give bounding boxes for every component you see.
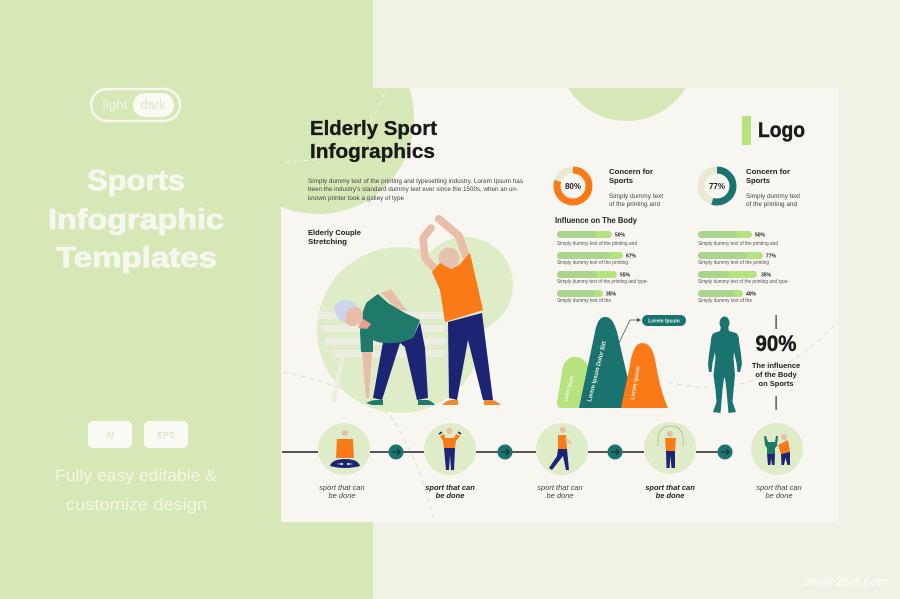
donut chart: 80% bbox=[557, 170, 589, 202]
caption 1 bbox=[319, 483, 365, 500]
subtitle: customize design bbox=[66, 495, 207, 514]
callout: lorem ipsum bbox=[619, 315, 686, 343]
bar chart: right column: Simply dummy text of the printing bbox=[698, 260, 769, 266]
bar chart: left column: 67% bbox=[626, 254, 637, 260]
bar chart: right column: 77% bbox=[766, 254, 777, 260]
decoration: top circle bbox=[568, 88, 686, 121]
toggle: light dark bbox=[91, 89, 180, 121]
infographic card bbox=[281, 88, 838, 522]
bar chart: right column: Simply dummy text of the printing and bbox=[698, 241, 778, 247]
badge: EPS: EPS bbox=[157, 430, 175, 440]
step 2: dumbbell icon bbox=[424, 423, 476, 475]
caption 3: sport that can bbox=[537, 483, 583, 492]
watermark: www.25xt.com bbox=[804, 573, 888, 589]
caption 2: sport that can bbox=[425, 483, 475, 492]
stat text: concern 2 bbox=[746, 167, 800, 208]
bar chart: right column: 50% bbox=[755, 232, 766, 238]
bar chart: left column: Simply dummy text of the printing and bbox=[557, 241, 637, 247]
caption 5 bbox=[756, 483, 802, 500]
arrow 1 bbox=[388, 444, 404, 460]
bar chart: left column: 50% bbox=[615, 232, 626, 238]
badge: AI bbox=[88, 421, 132, 448]
bar chart: left column: 55% bbox=[620, 272, 631, 278]
caption 3: be done bbox=[546, 491, 574, 500]
bar chart: left column: Simply dummy text of the printing bbox=[557, 260, 628, 266]
illustration: bench bbox=[319, 312, 445, 402]
stat: 90 percent: of the Body bbox=[755, 370, 797, 379]
stat: 90 percent: 90% bbox=[756, 331, 796, 356]
caption 4 bbox=[645, 483, 695, 500]
subtitle: Fully easy editable & bbox=[55, 466, 218, 485]
intro paragraph: known printer took a galley of type bbox=[308, 195, 404, 202]
stat: 90 percent bbox=[752, 315, 800, 410]
heading: influence on the body: Influence on The Body bbox=[555, 216, 638, 225]
illustration: backdrop blob bbox=[317, 237, 513, 413]
bar chart: right column bbox=[698, 231, 789, 304]
heading bbox=[310, 118, 437, 163]
heading: Elderly Sport bbox=[310, 118, 437, 140]
stat text: concern 1: Sports bbox=[609, 176, 633, 185]
step 4: skipping rope icon bbox=[644, 422, 696, 474]
illustration: man stretching bbox=[423, 219, 501, 405]
bar chart: left column: Simply dummy text of the bbox=[557, 298, 611, 304]
arrow 2 bbox=[498, 444, 512, 460]
logo bbox=[742, 116, 805, 145]
stat: 90 percent: The influence bbox=[752, 361, 800, 370]
timeline line bbox=[282, 451, 724, 453]
caption 4: be done bbox=[656, 491, 684, 500]
callout: lorem ipsum: Lorem Ipsum bbox=[648, 318, 680, 324]
stat text: concern 1 bbox=[609, 167, 663, 208]
caption 1: sport that can bbox=[319, 483, 365, 492]
decoration: top-left circle bbox=[281, 88, 414, 214]
donut chart: 77%: 77% bbox=[709, 182, 725, 191]
caption 5: be done bbox=[765, 491, 793, 500]
background: left green panel bbox=[0, 0, 373, 599]
mountain chart: Lorem Ipsum bbox=[563, 375, 576, 403]
stat text: concern 2: Simply dummy text bbox=[746, 193, 800, 200]
subtitle bbox=[55, 466, 218, 514]
arrow 3 bbox=[608, 444, 622, 460]
stat text: concern 2: of the printing and bbox=[746, 201, 797, 208]
toggle: light dark: dark bbox=[140, 98, 166, 112]
caption 2: be done bbox=[436, 491, 464, 500]
caption 4: sport that can bbox=[645, 483, 695, 492]
caption 2 bbox=[425, 483, 475, 500]
badge: AI: AI bbox=[106, 430, 114, 440]
caption 5: sport that can bbox=[756, 483, 802, 492]
step 3: walking icon bbox=[536, 423, 588, 475]
intro paragraph: been the industry's standard dummy text ever since the 1500s, when an un- bbox=[308, 186, 518, 193]
label: couple stretching bbox=[308, 228, 361, 246]
main title bbox=[48, 165, 224, 274]
bar chart: left column bbox=[557, 231, 648, 304]
bar chart: left column: Simply dummy text of the printing and type- bbox=[557, 279, 648, 285]
donut chart: 80%: 80% bbox=[565, 182, 581, 191]
stat text: concern 1: of the printing and bbox=[609, 201, 660, 208]
stat text: concern 2: Concern for bbox=[746, 167, 790, 176]
illustration: woman bending bbox=[334, 289, 435, 405]
label: couple stretching: Elderly Couple bbox=[308, 228, 361, 237]
main title: Templates bbox=[56, 242, 217, 274]
bar chart: right column: 35% bbox=[761, 272, 772, 278]
main title: Infographic bbox=[48, 204, 224, 236]
stat: 90 percent: on Sports bbox=[758, 379, 794, 388]
intro paragraph: Simply dummy text of the printing and typesetting industry. Lorem Ipsum has bbox=[308, 178, 523, 185]
mountain chart bbox=[557, 317, 668, 408]
badge: EPS bbox=[144, 421, 188, 448]
bar chart: right column: Simply dummy text of the printing and type- bbox=[698, 279, 789, 285]
icon: human body silhouette bbox=[708, 316, 742, 413]
donut chart: 77% bbox=[701, 170, 733, 202]
stat text: concern 1: Simply dummy text bbox=[609, 193, 663, 200]
intro paragraph bbox=[308, 178, 523, 202]
caption 1: be done bbox=[328, 491, 356, 500]
caption 3 bbox=[537, 483, 583, 500]
step 1: meditation icon bbox=[318, 423, 370, 475]
heading: Infographics bbox=[310, 141, 435, 163]
stat text: concern 1: Concern for bbox=[609, 167, 653, 176]
arrow 4 bbox=[718, 444, 732, 460]
mountain chart: Lorem Ipsum Dolor Sitt bbox=[587, 341, 608, 402]
toggle: light dark: light bbox=[102, 98, 128, 112]
bar chart: left column: 35% bbox=[606, 292, 617, 298]
step 5: couple icon bbox=[751, 423, 803, 475]
bar chart: right column: 40% bbox=[746, 292, 757, 298]
bar chart: right column: Simply dummy text of the bbox=[698, 298, 752, 304]
label: couple stretching: Stretching bbox=[308, 237, 347, 246]
mountain chart: Lorem Ipsum bbox=[630, 366, 642, 400]
logo: Logo bbox=[758, 119, 805, 142]
main title: Sports bbox=[87, 165, 185, 197]
stat text: concern 2: Sports bbox=[746, 176, 770, 185]
